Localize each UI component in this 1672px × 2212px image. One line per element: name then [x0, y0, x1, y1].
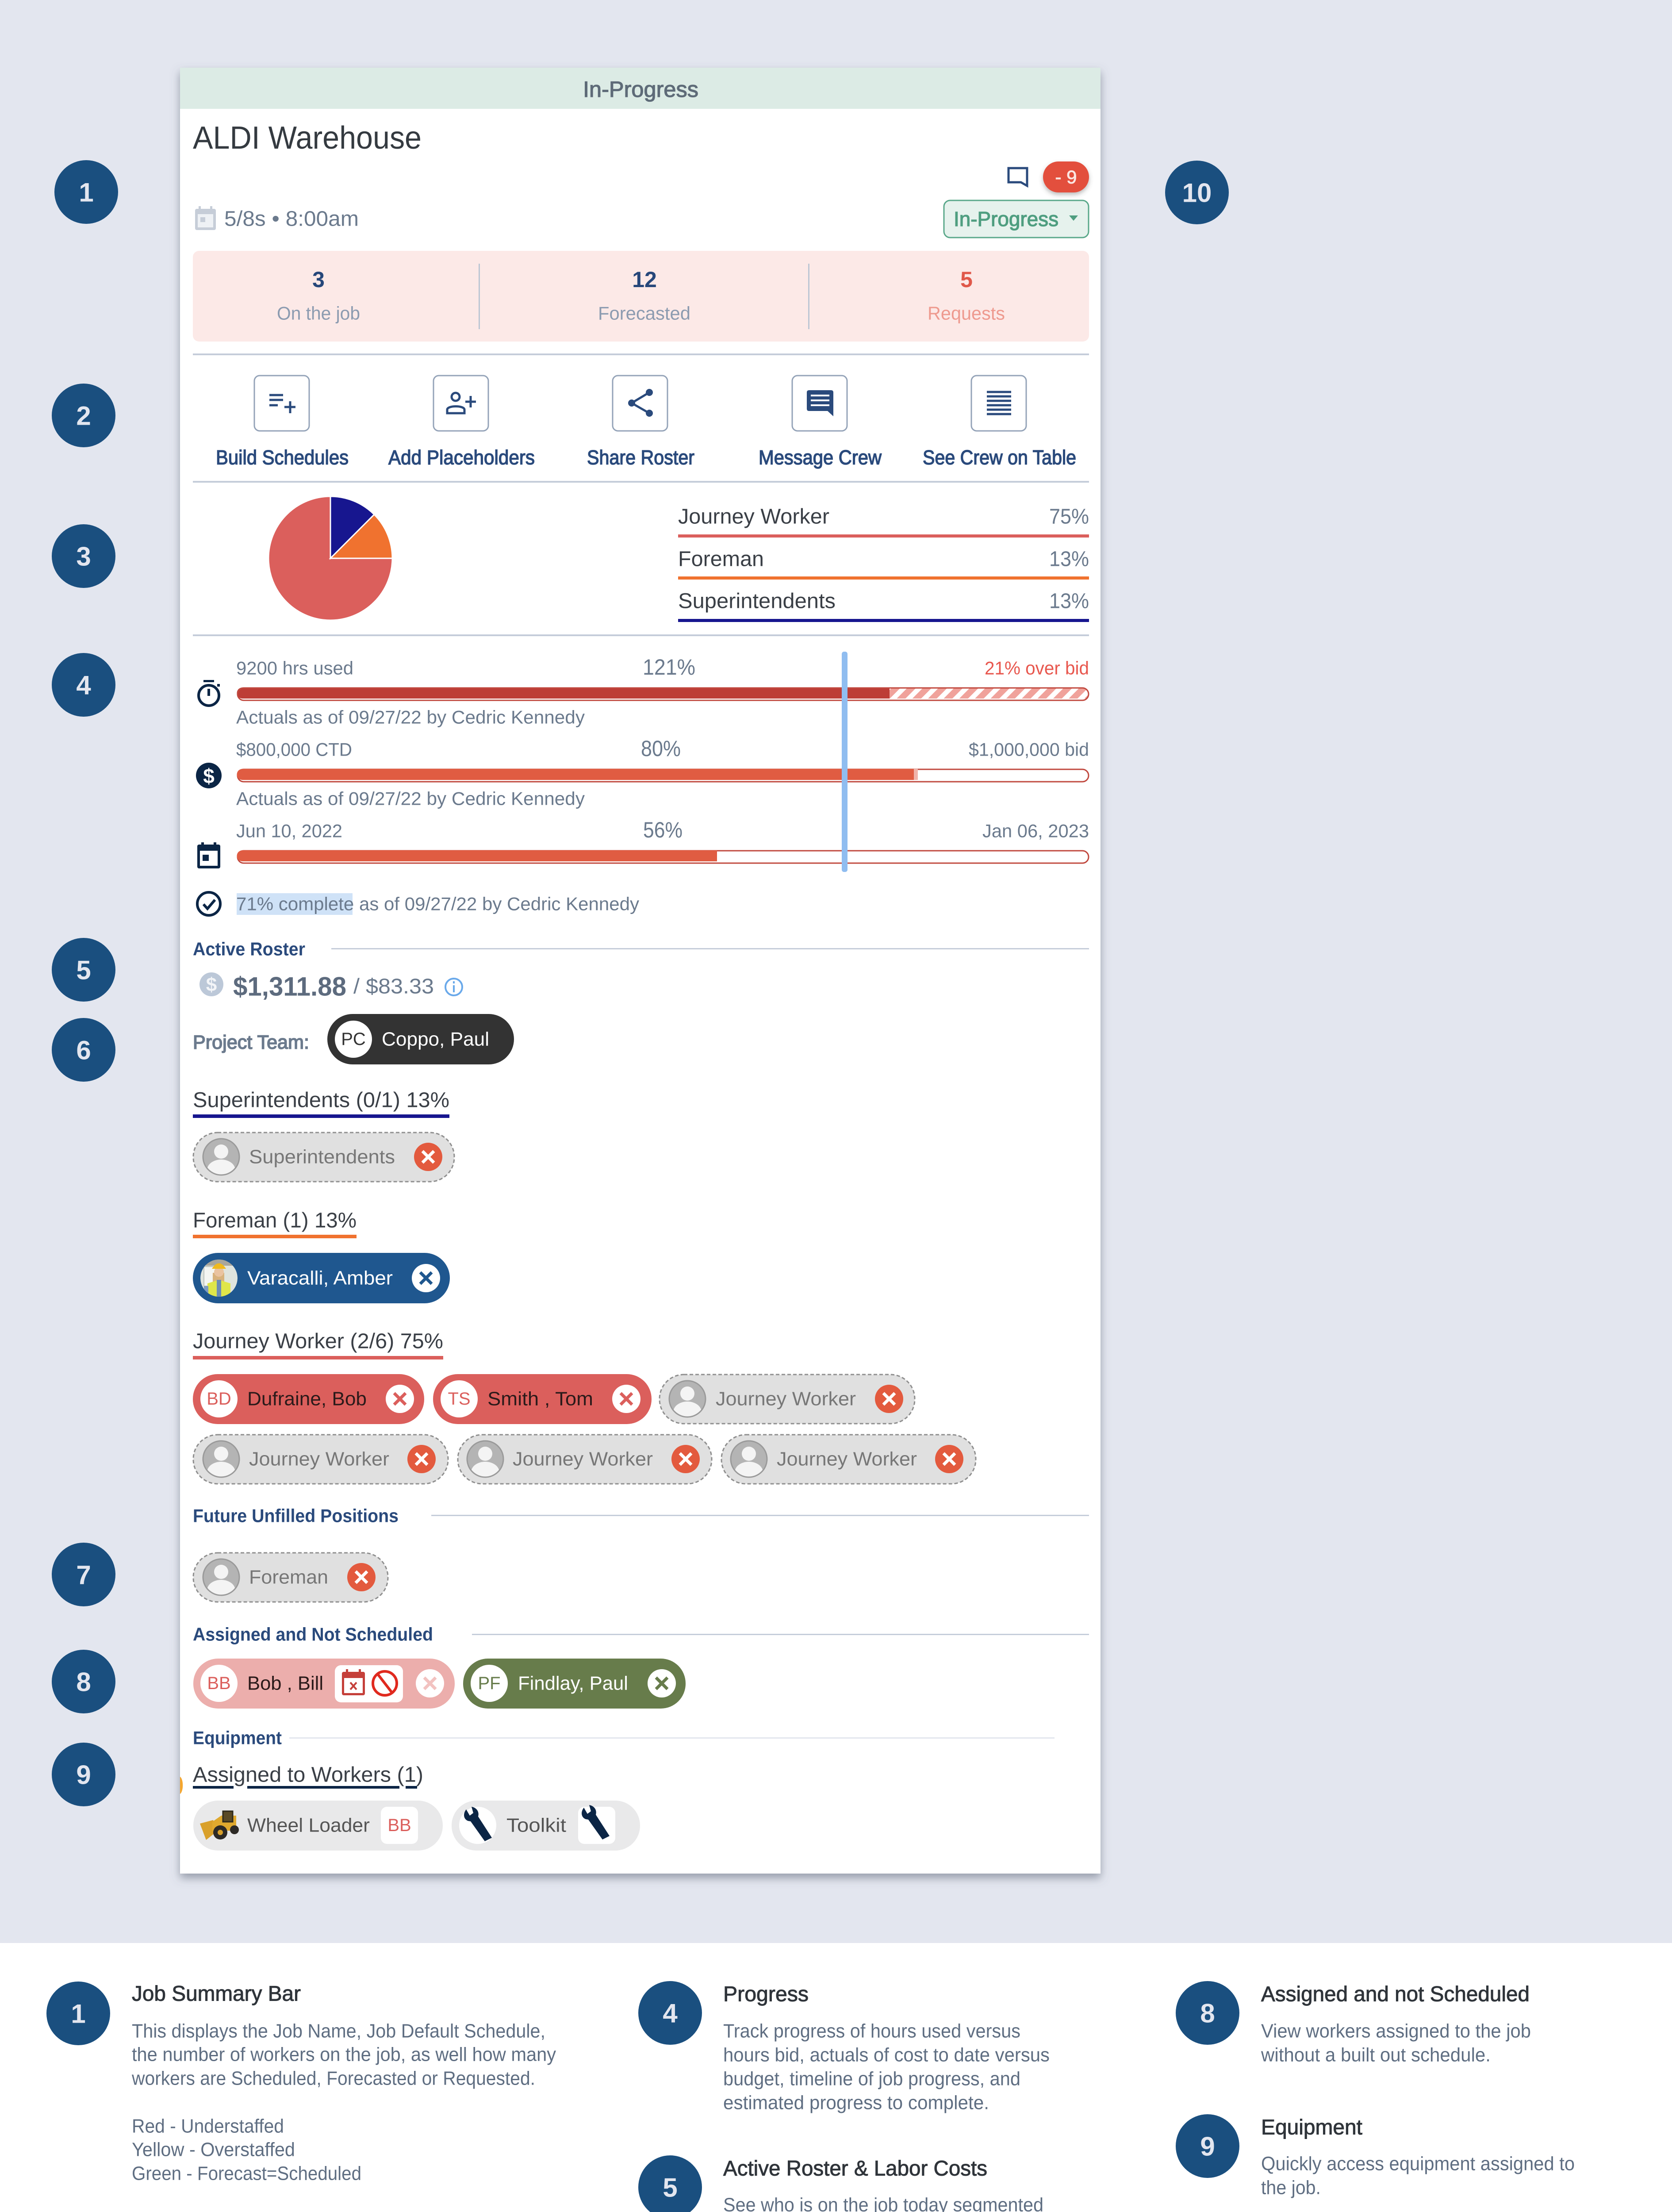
- legend 9: equipment: 9: [1200, 2131, 1215, 2162]
- legend 4: progress: estimated progress to complete.: [723, 2092, 989, 2114]
- project team: Project Team:: [193, 1032, 309, 1053]
- legend 8: assigned and not scheduled: without a built out schedule.: [1261, 2044, 1491, 2066]
- callout number 2: 2: [76, 401, 91, 431]
- legend 1: job summary bar: Yellow - Overstaffed: [132, 2139, 295, 2161]
- role: journey worker: Journey Worker (2/6) 75%: [193, 1330, 443, 1353]
- heading: equipment: Equipment: [193, 1727, 282, 1748]
- legend 4: progress: Progress: [723, 1983, 809, 2006]
- callout number 5: 5: [76, 956, 91, 985]
- chip: Bob, Bill: BB: [207, 1674, 231, 1693]
- job summary stats: 5: [960, 267, 973, 292]
- comment count badge: [1043, 161, 1089, 192]
- legend 4: progress: [638, 1981, 1050, 2114]
- legend 9: equipment: the job.: [1261, 2177, 1321, 2199]
- action: share roster: Share Roster: [587, 446, 694, 469]
- heading: future unfilled positions: [193, 1505, 1089, 1526]
- timeline bar: Jun 10, 2022: [236, 820, 342, 841]
- cost bar: $800,000 CTD: [236, 739, 352, 760]
- pie legend: Journey Worker: [678, 505, 829, 528]
- legend 9: equipment: Quickly access equipment assigned to: [1261, 2153, 1575, 2175]
- icon: check: [197, 892, 220, 915]
- chip: journey worker placeholder: Journey Worker: [249, 1448, 389, 1470]
- chip: Varacalli, Amber: Varacalli, Amber: [247, 1267, 393, 1289]
- chip: journey worker placeholder: Journey Worker: [513, 1448, 653, 1470]
- action: see crew on table: See Crew on Table: [923, 446, 1076, 469]
- icon: pale dollar: $: [206, 974, 217, 995]
- heading: assigned and not scheduled: [193, 1624, 1089, 1645]
- status dropdown: In-Progress: [954, 207, 1058, 230]
- legend 9: equipment: [1176, 2114, 1575, 2199]
- icon: timeline calendar: [197, 842, 220, 868]
- callout number 8: [52, 1650, 115, 1713]
- avatar photo: [200, 1260, 238, 1297]
- action: share roster: [587, 376, 694, 469]
- quick actions: [216, 376, 1076, 469]
- chip: journey worker placeholder: Journey Worker: [777, 1448, 917, 1470]
- chip: Findlay, Paul: [463, 1659, 686, 1709]
- legend 1: job summary bar: 1: [71, 1999, 86, 2029]
- orange edge marker: [180, 1777, 183, 1794]
- legend 8: assigned and not scheduled: 8: [1200, 1999, 1215, 2028]
- heading: future unfilled positions: Future Unfilled Positions: [193, 1505, 399, 1526]
- legend 8: assigned and not scheduled: [1176, 1981, 1531, 2066]
- cost bar: 80%: [641, 736, 681, 761]
- callout number 2: [52, 384, 115, 447]
- hours bar: 21% over bid: [985, 657, 1089, 679]
- project team: Coppo, Paul: [382, 1028, 489, 1050]
- legend 1: job summary bar: Job Summary Bar: [132, 1982, 301, 2006]
- hours bar: [236, 655, 1089, 727]
- chip: journey worker placeholder: Journey Worker: [716, 1388, 856, 1409]
- icon: calendar: [195, 206, 216, 230]
- chip: Wheel Loader: BB: [387, 1816, 411, 1835]
- action: add placeholders: Add Placeholders: [388, 446, 535, 469]
- chip: Findlay, Paul: PF: [478, 1674, 501, 1693]
- legend 4: progress: 4: [663, 1999, 678, 2028]
- cost bar: Actuals as of 09/27/22 by Cedric Kennedy: [236, 788, 585, 809]
- panel: roster card: [180, 68, 1101, 1874]
- job summary stats: 12: [632, 267, 657, 292]
- pie legend: Foreman: [678, 548, 764, 571]
- project team: [193, 1014, 514, 1064]
- callout number 9: 9: [76, 1760, 91, 1790]
- legend 1: job summary bar: Red - Understaffed: [132, 2116, 284, 2137]
- callout number 3: [52, 524, 115, 588]
- job summary stats: Requests: [928, 303, 1005, 324]
- cost bar: [236, 736, 1089, 809]
- chip: Bob, Bill: [193, 1659, 455, 1709]
- status banner: In-Progress: [583, 77, 698, 102]
- action: see crew on table: [923, 376, 1076, 469]
- icon: stopwatch: [199, 680, 220, 706]
- chip: Varacalli, Amber: [193, 1253, 450, 1303]
- timeline bar: 56%: [643, 818, 683, 842]
- hours bar: 9200 hrs used: [236, 657, 353, 679]
- legend 9: equipment: Equipment: [1261, 2116, 1362, 2139]
- action: message crew: [759, 376, 882, 469]
- card surface: [180, 68, 1101, 1874]
- legend background: [0, 1943, 1672, 2212]
- labor rate: $1,311.88: [233, 972, 346, 1002]
- chip: Bob, Bill: Bob , Bill: [247, 1672, 323, 1694]
- callout number 6: [52, 1018, 115, 1082]
- legend 1: job summary bar: Green - Forecast=Scheduled: [132, 2162, 361, 2185]
- icon: comment: [1009, 168, 1027, 186]
- callout number 10: [1165, 161, 1229, 224]
- chip: foreman placeholder: [193, 1553, 388, 1602]
- assigned to workers: Assigned to Workers (1): [193, 1763, 423, 1786]
- percent complete: 71% complete as of 09/27/22 by Cedric Kennedy: [236, 894, 639, 914]
- heading: active roster: [193, 939, 1089, 959]
- icon: unscheduled calendar: [342, 1669, 365, 1695]
- legend 5: active roster and labor costs: [638, 2155, 1054, 2212]
- chip: Dufraine, Bob: Dufraine, Bob: [247, 1388, 367, 1409]
- callout number 7: 7: [76, 1560, 91, 1590]
- callout number 1: 1: [79, 178, 94, 207]
- chip: Toolkit: [452, 1801, 640, 1851]
- pie chart: [268, 496, 392, 620]
- legend 4: progress: Track progress of hours used versus: [723, 2020, 1020, 2042]
- legend 1: job summary bar: [46, 1982, 556, 2185]
- role: foreman: [193, 1209, 450, 1303]
- pie legend: 75%: [1049, 505, 1089, 528]
- heading: equipment: [193, 1727, 1055, 1748]
- chip: superintendents placeholder: [193, 1133, 454, 1182]
- action: build schedules: Build Schedules: [216, 446, 349, 469]
- status banner: [180, 68, 1101, 109]
- role: superintendents: [193, 1088, 454, 1182]
- chip: journey worker placeholder: [660, 1375, 915, 1424]
- chip: Toolkit: Toolkit: [506, 1815, 566, 1836]
- heading: active roster: Active Roster: [193, 939, 305, 959]
- chip: superintendents placeholder: Superintendents: [249, 1146, 395, 1168]
- labor rate: / $83.33: [353, 975, 434, 998]
- pie legend: 13%: [1049, 589, 1089, 613]
- chip: Smith, Tom: Smith , Tom: [487, 1388, 593, 1409]
- job summary stats: Forecasted: [598, 303, 690, 324]
- chip: Dufraine, Bob: BD: [207, 1389, 231, 1409]
- timeline bar: [236, 818, 1089, 863]
- today marker: [842, 652, 848, 872]
- legend 4: progress: hours bid, actuals of cost to date versus: [723, 2044, 1050, 2066]
- pie legend: 13%: [1049, 548, 1089, 571]
- icon: info: [445, 979, 462, 995]
- callout number 1: [54, 160, 118, 224]
- action: message crew: Message Crew: [759, 446, 882, 469]
- chip: journey worker placeholder: [721, 1435, 976, 1484]
- chip: Findlay, Paul: Findlay, Paul: [518, 1672, 628, 1694]
- action: add placeholders: [388, 376, 535, 469]
- job title: ALDI Warehouse: [193, 120, 422, 156]
- comment count badge: - 9: [1055, 166, 1077, 188]
- callout number 5: [52, 938, 115, 1002]
- role: journey worker: [193, 1330, 976, 1484]
- job summary stats: On the job: [277, 303, 360, 324]
- chip: journey worker placeholder: [458, 1435, 712, 1484]
- pie legend: [678, 505, 1089, 622]
- callout number 3: 3: [76, 541, 91, 572]
- default schedule: 5/8s • 8:00am: [224, 207, 359, 231]
- job summary stats: [193, 251, 1089, 342]
- chip: foreman placeholder: Foreman: [249, 1566, 328, 1588]
- callout number 6: 6: [76, 1035, 91, 1065]
- pie legend: Superintendents: [678, 589, 836, 613]
- chip: Wheel Loader: Wheel Loader: [247, 1815, 370, 1836]
- legend 5: active roster and labor costs: 5: [663, 2173, 678, 2202]
- chip: journey worker placeholder: [193, 1435, 448, 1484]
- icon: dollar: $: [203, 764, 215, 787]
- callout number 4: 4: [76, 671, 91, 700]
- legend 1: job summary bar: This displays the Job Name, Job Default Schedule,: [132, 2020, 545, 2042]
- callout number 4: [52, 653, 115, 717]
- status dropdown: [944, 200, 1089, 238]
- action: build schedules: [216, 376, 349, 469]
- icon: wheel loader: [200, 1811, 239, 1840]
- icon: no symbol: [373, 1671, 397, 1695]
- callout number 8: 8: [76, 1667, 91, 1697]
- hours bar: 121%: [643, 655, 695, 680]
- heading: assigned and not scheduled: Assigned and Not Scheduled: [193, 1624, 433, 1645]
- role: superintendents: Superintendents (0/1) 13%: [193, 1088, 449, 1112]
- callout number 10: 10: [1182, 178, 1212, 208]
- legend 5: active roster and labor costs: Active Roster & Labor Costs: [723, 2157, 987, 2180]
- legend 1: job summary bar: workers are Scheduled, Forecasted or Requested.: [131, 2068, 535, 2089]
- chip: Smith, Tom: TS: [448, 1389, 471, 1409]
- chip: Dufraine, Bob: [193, 1374, 424, 1424]
- icon: dollar: [196, 763, 222, 788]
- legend 1: job summary bar: the number of workers on the job, as well how many: [132, 2044, 556, 2065]
- job summary stats: 3: [312, 267, 325, 292]
- project team: PC: [341, 1029, 366, 1049]
- hours bar: Actuals as of 09/27/22 by Cedric Kennedy: [236, 707, 585, 727]
- cost bar: $1,000,000 bid: [969, 739, 1089, 760]
- chip: Wheel Loader: [193, 1801, 443, 1851]
- labor rate: [199, 972, 462, 1002]
- legend 4: progress: budget, timeline of job progress, and: [723, 2068, 1020, 2090]
- icon: pale dollar: [199, 972, 223, 996]
- timeline bar: Jan 06, 2023: [982, 820, 1089, 841]
- progress section: [196, 652, 1089, 915]
- role: foreman: Foreman (1) 13%: [193, 1209, 357, 1233]
- callout number 7: [52, 1543, 115, 1606]
- legend 8: assigned and not scheduled: Assigned and not Scheduled: [1261, 1983, 1530, 2006]
- legend 8: assigned and not scheduled: View workers assigned to the job: [1261, 2020, 1531, 2042]
- chip: Smith, Tom: [433, 1374, 652, 1424]
- callout number 9: [52, 1743, 115, 1806]
